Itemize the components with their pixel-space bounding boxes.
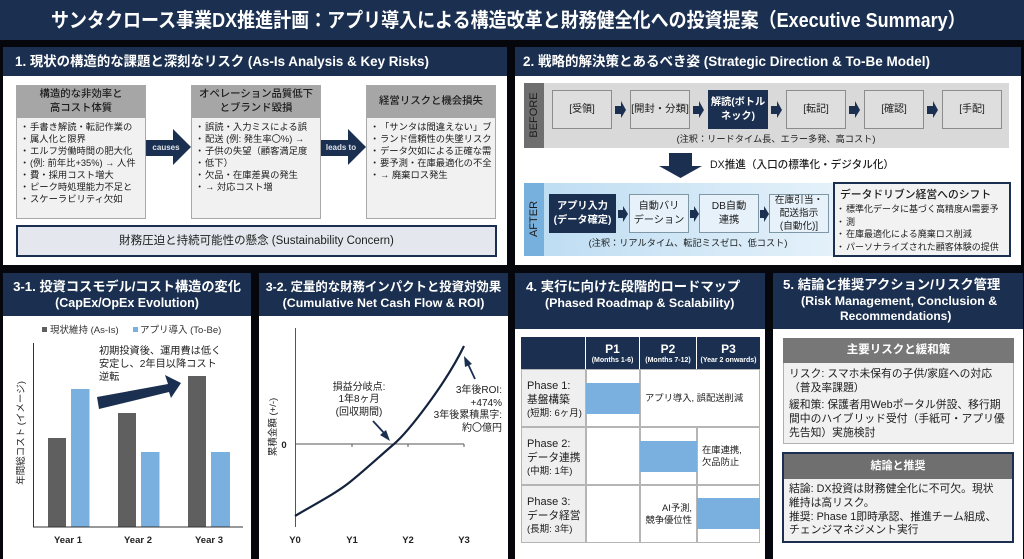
panel 2 heading: 2. 戦略的解決策とあるべき姿 (Strategic Direction & To-Be Model): [523, 54, 930, 69]
arrow: leads to: leads to: [326, 143, 356, 152]
step: auto validation: 自動バリ: [639, 200, 679, 212]
after note: (注釈：リアルタイム、転記ミスゼロ、低コスト): [589, 238, 787, 248]
callout bullets: 在庫最適化による廃棄ロス削減: [846, 229, 972, 239]
DX transition label: DX推進（入口の標準化・デジタル化）: [710, 159, 894, 171]
phase 2 P1 cell: [586, 427, 640, 485]
break-even arrow: [373, 421, 385, 434]
callout bullets: [840, 204, 999, 252]
conclusion text: チェンジマネジメント実行: [789, 524, 919, 536]
panel 4: roadmap: [515, 273, 765, 559]
phase 2 label: データ連携: [527, 452, 580, 464]
panel 5 heading: Recommendations): [840, 309, 951, 323]
annotation: [99, 344, 221, 383]
column heading: 構造的な非効率と: [39, 89, 123, 100]
column heading: 経営リスクと機会損失: [379, 96, 483, 107]
callout bullets: パーソナライズされた顧客体験の提供: [846, 242, 999, 252]
step: DB integration: 連携: [719, 214, 739, 226]
step: stock and dispatch: [769, 194, 829, 233]
after band: [524, 183, 833, 256]
year labels: Year 1: [54, 535, 83, 546]
column bullets: ランド信頼性の失墜リスク: [380, 134, 492, 144]
column bullets: 要予測・在庫最適化の不全: [380, 158, 492, 168]
column heading: 高コスト体質: [50, 103, 112, 114]
step: auto validation: [629, 194, 689, 233]
step: transcribe: [転記]: [803, 104, 829, 114]
column bullets: 欠品・在庫差異の発生: [205, 170, 298, 180]
phase 3 label: Phase 3:: [527, 496, 570, 508]
panel 5 heading: (Risk Management, Conclusion &: [801, 294, 997, 308]
break-even annotation: (回収期間): [336, 406, 382, 418]
column bullets: スケーラビリティ欠如: [30, 194, 122, 204]
risk text: （普及率課題）: [789, 382, 865, 394]
annotation: 逆転: [99, 370, 119, 383]
header P2: (Months 7-12): [645, 357, 691, 364]
phase 3 P3 cell: [697, 485, 760, 543]
ROI annotation: 3年後ROI:: [456, 383, 502, 396]
roadmap table: [521, 337, 760, 543]
column bullets: 誤読・入力ミスによる誤: [205, 122, 307, 132]
column bullets: ピーク時処理能力不足と: [30, 182, 132, 192]
column bullets: 低下）: [205, 158, 233, 168]
header P3: [697, 337, 760, 369]
phase 1 label: 基盤構築: [527, 394, 570, 406]
after flow arrows: [618, 206, 769, 222]
header P2: [640, 337, 696, 369]
conclusion text: 維持は高リスク。: [789, 497, 875, 509]
title: サンタクロース事業DX推進計画：アプリ導入による構造改革と財務健全化への投資提案（Executive Summary）: [51, 10, 966, 32]
panel 3-2 heading: [259, 273, 508, 316]
trend arrow: [97, 375, 181, 409]
axis title: 年間総コスト (イメージ): [15, 381, 27, 485]
ROI annotation: [434, 383, 502, 434]
phase 1 note: アプリ導入, 誤配送削減: [645, 393, 743, 403]
step: app input: [549, 194, 616, 233]
phase 1 P1 cell: [586, 369, 640, 427]
phase 3 note: 競争優位性: [646, 515, 692, 525]
phase 1 bar: [586, 383, 640, 414]
conclusion heading: 結論と推奨: [870, 460, 926, 472]
after label: AFTER: [528, 201, 540, 237]
annotation: 安定し、2年目以降コスト: [99, 357, 217, 370]
annotation: 初期投資後、運用費は低く: [99, 344, 221, 357]
data-driven management callout: [833, 182, 1011, 257]
column bullets: 配送 (例: 発生率〇%) →: [205, 134, 304, 144]
step: transcribe: [786, 90, 846, 129]
column bullets: 手書き解読・転記作業の: [30, 122, 132, 132]
risk box heading: [783, 338, 1014, 363]
step: open and sort: [開封・分類]: [631, 104, 689, 114]
axis labels: 0: [281, 440, 287, 451]
column bullets: → 対応コスト増: [205, 182, 273, 192]
step: stock and dispatch: 在庫引当・: [775, 195, 823, 206]
arrow: causes: [146, 129, 191, 165]
phase 3 P1 cell: [586, 485, 640, 543]
phase 3 bar: [697, 498, 760, 529]
step: arrange: [942, 90, 1002, 129]
column bullets: [24, 122, 136, 204]
panel 5: conclusion and risks: [773, 273, 1023, 559]
risk box heading: 主要リスクと緩和策: [847, 344, 950, 356]
ROI annotation: +474%: [471, 398, 502, 409]
axis title: 累積金額 (+/-): [267, 398, 279, 456]
panel 4 heading: (Phased Roadmap & Scalability): [545, 296, 734, 310]
panel 1 heading: 1. 現状の構造的な課題と深刻なリスク (As-Is Analysis & Key Risks): [15, 54, 429, 69]
panel 2: strategic direction: [515, 47, 1021, 265]
column bullets: 「サンタは間違えない」ブ: [380, 122, 492, 132]
break-even annotation: 損益分岐点:: [333, 380, 385, 393]
column bullets: [374, 122, 492, 180]
arrow: causes: causes: [152, 143, 180, 152]
legend: アプリ導入 (To-Be): [140, 324, 221, 336]
before note: (注釈：リードタイム長、エラー多発、高コスト): [677, 134, 875, 144]
column bullets: 費・採用コスト増大: [30, 170, 114, 180]
year labels: [54, 535, 223, 546]
column bullets: [198, 122, 307, 192]
panel 3-1 heading: [3, 273, 251, 316]
conclusion text: 推奨: Phase 1即時承認、推進チーム組成、: [789, 511, 996, 523]
callout bullets: 標準化データに基づく高精度AI需要予: [846, 204, 999, 214]
step: decipher bottleneck: ネック): [721, 110, 755, 122]
panel 3-1 heading: (CapEx/OpEx Evolution): [55, 296, 199, 310]
column bullets: 属人化と限界: [30, 134, 86, 144]
column heading: [17, 86, 145, 118]
break-even annotation: [333, 380, 385, 418]
risk text: [789, 368, 1005, 439]
step: receive: [552, 90, 612, 129]
phase 3 label: (長期: 3年): [527, 524, 572, 535]
phase 3 note: AI予測,: [662, 503, 692, 513]
ROI annotation: 約〇億円: [462, 421, 502, 434]
step: open and sort: [630, 90, 690, 129]
phase 2 note: 欠品防止: [702, 457, 739, 467]
panel 5 heading: [773, 273, 1023, 329]
axis labels: [281, 440, 470, 546]
panel 4 heading: [515, 273, 765, 329]
phase 1 note: [640, 369, 760, 427]
phase 2 label: (中期: 1年): [527, 466, 572, 477]
phase 1 label: [521, 369, 586, 427]
panel 3-2: cash flow: [259, 273, 508, 559]
column: quality decline: [191, 85, 321, 219]
header P1: [586, 337, 639, 369]
step: DB integration: [699, 194, 759, 233]
panel 1 heading: [3, 47, 507, 76]
panel 3-1: cost model: [3, 273, 251, 559]
legend: [42, 324, 221, 336]
phase 2 P2 cell: [640, 427, 697, 485]
conclusion text: [789, 482, 996, 536]
column: management risk: [366, 85, 496, 219]
phase 2 label: [521, 427, 586, 485]
column heading: [367, 86, 495, 118]
panel 2 heading: [515, 47, 1021, 76]
title bar: [0, 0, 1024, 40]
ROI annotation: 3年後累積黒字:: [434, 408, 502, 421]
ROI arrow: [468, 364, 475, 379]
table header blank: [521, 337, 585, 369]
bars: [48, 376, 230, 527]
step: DB integration: DB自動: [712, 200, 746, 212]
panel 1: as-is analysis: [3, 47, 507, 265]
step: decipher bottleneck: [708, 90, 768, 129]
step: auto validation: デーション: [634, 214, 684, 226]
header P1: (Months 1-6): [592, 357, 633, 364]
step: confirm: [864, 90, 924, 129]
after label: [524, 183, 544, 256]
phase 3 label: [521, 485, 586, 543]
before label: BEFORE: [528, 92, 540, 138]
column heading: [192, 86, 320, 118]
phase 2 note: [697, 427, 760, 485]
panel 4 heading: 4. 実行に向けた段階的ロードマップ: [526, 279, 740, 294]
phase 1 label: (短期: 6ヶ月): [527, 408, 582, 419]
step: receive: [受領]: [569, 104, 595, 114]
before flow arrows: [615, 101, 938, 118]
panel 3-1 heading: 3-1. 投資コスモデル/コスト構造の変化: [13, 279, 241, 294]
phase 3 label: データ経営: [527, 510, 580, 522]
conclusion box: [782, 452, 1014, 543]
axis labels: Y1: [346, 535, 359, 546]
axis labels: Y2: [402, 535, 414, 546]
phase 1 label: Phase 1:: [527, 380, 570, 392]
phase 3 note: [640, 485, 697, 543]
callout bullets: 測: [846, 216, 855, 226]
step: stock and dispatch: (自動化)]: [780, 221, 818, 232]
column bullets: (例: 前年比+35%) → 人件: [30, 158, 136, 168]
header P2: P2: [661, 342, 675, 356]
column bullets: 子供の失望（顧客満足度: [205, 146, 307, 156]
line chart: cumulative cash flow: [267, 328, 502, 546]
step: decipher bottleneck: 解読(ボトル: [711, 96, 765, 108]
sustainability concern callout: [16, 225, 497, 257]
before band: [524, 83, 1009, 148]
phase 2 bar: [640, 441, 697, 472]
year labels: Year 2: [124, 535, 152, 546]
phase 2 note: 在庫連携,: [702, 445, 742, 455]
axis labels: Y3: [458, 535, 470, 546]
before label: [524, 83, 544, 148]
risk box: [783, 338, 1014, 444]
panel 3-2 heading: 3-2. 定量的な財務インパクトと投資対効果: [266, 280, 501, 294]
column heading: とブランド毀損: [220, 103, 292, 114]
column bullets: → 廃棄ロス発生: [380, 170, 448, 180]
column heading: オペレーション品質低下: [199, 89, 313, 100]
panel 3-2 heading: (Cumulative Net Cash Flow & ROI): [283, 296, 484, 310]
risk text: 緩和策: 保護者用Webポータル併設、移行期: [789, 399, 1001, 411]
sustainability concern callout: 財務圧迫と持続可能性の懸念 (Sustainability Concern): [119, 235, 394, 247]
arrow: leads to: [321, 129, 366, 165]
step: stock and dispatch: 配送指示: [780, 208, 818, 219]
step: app input: (データ確定): [554, 214, 611, 226]
conclusion heading: [784, 454, 1012, 479]
panel 5 heading: 5. 結論と推奨アクション/リスク管理: [783, 277, 1000, 292]
header P3: (Year 2 onwards): [700, 357, 757, 364]
column bullets: データ欠如による正確な需: [380, 146, 491, 156]
risk text: 先告知）実施検討: [789, 427, 875, 439]
callout heading: データドリブン経営へのシフト: [840, 189, 991, 201]
header P3: P3: [721, 342, 736, 356]
risk text: リスク: スマホ未保有の子供/家庭への対応: [789, 368, 992, 380]
phase 2 label: Phase 2:: [527, 438, 570, 450]
legend: 現状維持 (As-Is): [50, 324, 119, 336]
cash flow curve: [295, 346, 464, 516]
risk text: 間中のハイブリッド受付（手紙可・アプリ優: [789, 413, 1005, 425]
axis labels: Y0: [289, 535, 301, 546]
step: arrange: [手配]: [959, 104, 985, 114]
column: structural inefficiency: [16, 85, 146, 219]
break-even annotation: 1年8ヶ月: [338, 392, 380, 405]
column bullets: エルフ労働時間の肥大化: [30, 146, 132, 156]
step: confirm: [確認]: [881, 104, 907, 114]
header P1: P1: [605, 342, 620, 356]
year labels: Year 3: [195, 535, 223, 546]
step: app input: アプリ入力: [557, 200, 608, 212]
down arrow: DX: [659, 153, 702, 178]
conclusion text: 結論: DX投資は財務健全化に不可欠。現状: [789, 483, 994, 495]
bar chart: annual cost: [15, 324, 243, 546]
